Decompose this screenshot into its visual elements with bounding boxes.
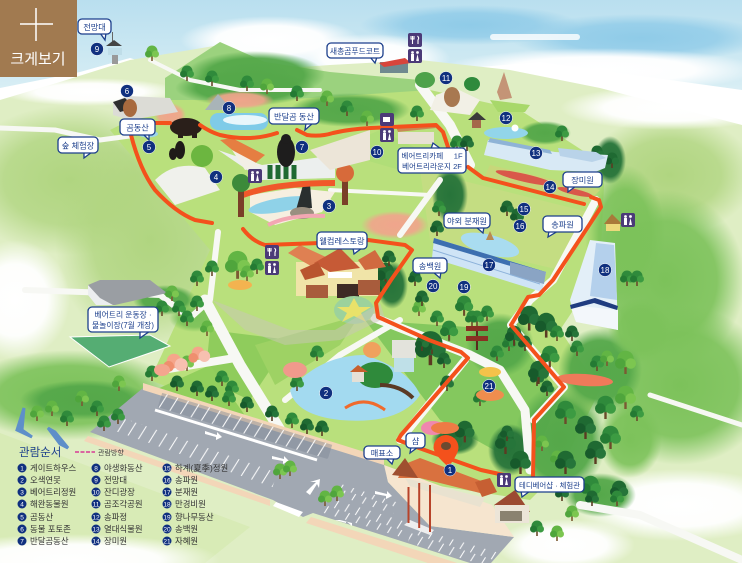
- icon: restroom cafe: [380, 128, 394, 142]
- icon: restaurant top: [408, 33, 422, 47]
- icon: restroom welcome: [265, 261, 279, 275]
- legend column 1: 4: [20, 502, 24, 508]
- number badges: 3: [327, 202, 332, 211]
- location pin: [434, 435, 458, 467]
- number badges: 4: [214, 173, 219, 182]
- gate house: [392, 458, 497, 507]
- callout: bear tree cafe: 베어트리라운지 2F: [402, 161, 462, 171]
- legend column 1: 2: [20, 478, 24, 484]
- callout: observatory: 전망대: [83, 22, 106, 32]
- greenhouse 17: [432, 238, 546, 292]
- park lawn base: [110, 90, 605, 500]
- number badges: 17: [485, 261, 494, 270]
- number badges: 6: [125, 87, 130, 96]
- legend column 3: 15: [163, 466, 171, 472]
- callout: pine garden: 송파원: [551, 220, 574, 230]
- legend column 1: [18, 463, 77, 546]
- star lawn: [334, 296, 374, 324]
- legend column 3: 송파원: [175, 475, 198, 485]
- amenity icons: [248, 33, 635, 487]
- legend column 2: 14: [92, 538, 100, 546]
- legend column 1: 게이트하우스: [30, 463, 77, 473]
- callout: food court: [327, 43, 383, 63]
- legend: [18, 446, 228, 546]
- welcome restaurant: [288, 245, 386, 298]
- signpost: [466, 326, 488, 350]
- food court building: [379, 58, 411, 73]
- enlarge button: [0, 0, 77, 77]
- legend column 3: 16: [163, 478, 171, 484]
- enlarge button: 크게보기: [10, 51, 66, 68]
- number badges: 11: [442, 74, 451, 83]
- pavilion and 12 pond: [468, 112, 528, 139]
- legend column 3: 송백원: [175, 524, 198, 534]
- number badges: 15: [520, 205, 529, 214]
- callout: ticket office: 매표소: [371, 449, 394, 458]
- number badges: 16: [516, 222, 525, 231]
- legend column 2: 12: [92, 514, 100, 522]
- icon: cafe: [380, 113, 394, 126]
- number badges: 5: [147, 143, 152, 152]
- icon: restroom top: [408, 49, 422, 63]
- legend column 1: 3: [20, 490, 24, 496]
- number badges: 19: [460, 283, 469, 292]
- orange visitor route: [131, 123, 601, 477]
- legend column 2: 잔디광장: [104, 487, 135, 497]
- callout: bear tree cafe: [398, 143, 466, 173]
- callout: bear tree cafe: 베어트리카페 1F: [401, 150, 463, 160]
- icon: restroom east: [621, 213, 635, 227]
- callout: shop: 샵: [412, 436, 420, 446]
- legend column 3: 21: [163, 538, 171, 546]
- legend column 3: [162, 463, 228, 546]
- legend column 2: 8: [94, 466, 98, 472]
- legend column 1: 5: [20, 514, 24, 522]
- rose garden 14: [483, 165, 600, 205]
- legend column 2: 야생화동산: [104, 463, 143, 473]
- callout: bear hill: 곰동산: [126, 122, 149, 132]
- callout: outdoor bonsai: 야외 분재원: [447, 216, 487, 226]
- greenhouse 13: [484, 138, 608, 172]
- icon: restaurant welcome: [265, 245, 279, 259]
- foliage masses: [20, 70, 672, 517]
- callout: pine cypress garden: [413, 258, 447, 278]
- callout: rose garden: [563, 172, 602, 192]
- legend column 2: 전망대: [104, 475, 127, 485]
- legend column 2: 13: [92, 526, 100, 534]
- small hut: [604, 214, 622, 231]
- cafe building: [396, 124, 436, 144]
- sports hall: [88, 280, 167, 305]
- legend title: 관람순서: [19, 446, 61, 459]
- rock statues (11 garden): [415, 72, 530, 115]
- number badges: 2: [324, 389, 329, 398]
- number badges: 18: [601, 266, 610, 275]
- legend column 1: 반달곰동산: [30, 536, 69, 546]
- callout: rose garden: 장미원: [571, 175, 594, 185]
- legend column 1: 곰동산: [30, 512, 53, 522]
- parking lot: [84, 383, 514, 563]
- upper gardens: [113, 94, 370, 225]
- number badges: 1: [448, 466, 453, 475]
- callout: outdoor bonsai: [444, 213, 490, 233]
- callout: bear hill: [120, 119, 155, 140]
- legend column 2: 곰조각공원: [104, 499, 143, 509]
- legend column 2: [92, 463, 143, 546]
- callout: welcome restaurant: 웰컴레스토랑: [319, 236, 365, 246]
- number badges: 9: [95, 45, 100, 54]
- callout: observatory: [78, 19, 111, 40]
- route key: 관람방향: [98, 448, 124, 457]
- callout: welcome restaurant: [317, 232, 367, 254]
- legend column 3: 향나무동산: [175, 512, 214, 522]
- stone garden wall: [212, 300, 385, 345]
- legend column 1: 6: [20, 526, 24, 534]
- callout: moon bear hill: [269, 108, 319, 130]
- legend column 3: 19: [163, 514, 171, 522]
- callout: sports ground: [88, 307, 158, 338]
- small tower: [392, 340, 416, 372]
- stream: [17, 408, 68, 448]
- legend column 2: 11: [93, 502, 100, 508]
- number badges: [90, 42, 612, 476]
- legend column 1: 7: [20, 538, 24, 546]
- number badges: 10: [373, 148, 382, 157]
- callouts: [58, 19, 602, 497]
- number badges: 7: [300, 143, 305, 152]
- callout: pine cypress garden: 송백원: [419, 261, 441, 271]
- callout: teddy bear shop: [515, 477, 584, 497]
- legend column 3: 분재원: [175, 487, 198, 497]
- sky: [0, 0, 742, 140]
- legend column 2: 10: [92, 490, 100, 496]
- legend column 3: 18: [163, 502, 171, 508]
- legend column 1: 해완동물원: [30, 499, 69, 509]
- callout: shop: [406, 433, 425, 453]
- number badges: 21: [485, 382, 494, 391]
- legend column 3: 하계(夏季)정원: [175, 463, 228, 473]
- flower beds: [154, 280, 613, 435]
- legend column 2: 열대식물원: [104, 524, 143, 534]
- legend column 3: 만경비원: [175, 499, 206, 509]
- number badges: 8: [227, 104, 232, 113]
- route key: [75, 448, 124, 457]
- legend column 1: 1: [20, 466, 24, 472]
- callout: sports ground: 물놀이장(7월 개장): [92, 320, 154, 330]
- callout: teddy bear shop: 테디베어샵 · 체험관: [519, 481, 580, 490]
- legend column 2: 장미원: [104, 536, 127, 546]
- entrance plaza: [384, 465, 514, 537]
- flag poles: [404, 483, 434, 535]
- bears: [169, 118, 295, 167]
- legend column 3: 20: [163, 526, 171, 534]
- lot surface: [90, 388, 514, 563]
- callout: food court: 새총곰푸드코트: [330, 47, 380, 56]
- teddy bear shop: [494, 490, 530, 523]
- legend column 1: 동물 포토존: [30, 524, 71, 534]
- legend ground: [0, 433, 250, 563]
- pond 2: [290, 355, 420, 421]
- greenhouse 18: [570, 240, 618, 330]
- icon: restroom entrance: [497, 473, 511, 487]
- callout: forest experience: 숲 체험장: [62, 140, 95, 150]
- number badges: 14: [546, 183, 555, 192]
- legend column 2: 송파정: [104, 512, 127, 522]
- icon: restroom garden: [248, 169, 262, 183]
- trees: [30, 46, 644, 541]
- callout: forest experience: [58, 137, 98, 158]
- number badges: 12: [502, 114, 511, 123]
- callout: pine garden: [543, 216, 582, 237]
- callout: sports ground: 베어트리 운동장 ·: [94, 310, 152, 320]
- callout: moon bear hill: 반달곰 동산: [274, 112, 314, 122]
- legend column 3: 17: [163, 490, 171, 496]
- sports field: [70, 335, 170, 367]
- callout: ticket office: [364, 446, 400, 464]
- bonsai garden: [458, 228, 522, 262]
- legend column 3: 자혜원: [175, 536, 198, 546]
- observation tower: [106, 32, 122, 64]
- number badges: 20: [429, 282, 438, 291]
- number badges: 13: [532, 149, 541, 158]
- legend column 1: 오색연못: [30, 475, 61, 485]
- legend column 1: 베어트리정원: [30, 487, 76, 497]
- legend column 2: 9: [94, 478, 98, 484]
